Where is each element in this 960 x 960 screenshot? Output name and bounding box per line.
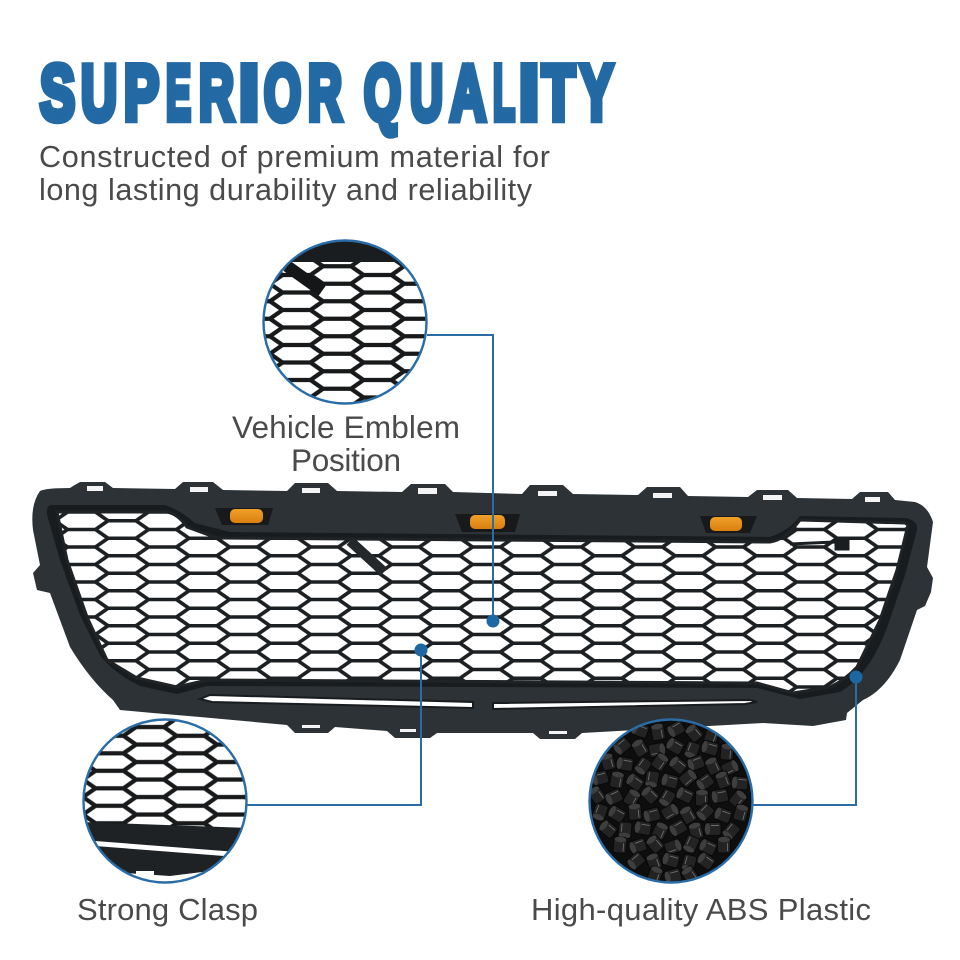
title: I bbox=[519, 48, 539, 136]
amber marker lamp right bbox=[700, 516, 757, 533]
title: R bbox=[308, 48, 342, 136]
amber marker lamp left bbox=[215, 508, 273, 525]
honeycomb mesh opening bbox=[57, 512, 908, 693]
subtitle text block bbox=[39, 140, 550, 207]
title: U bbox=[81, 48, 117, 136]
title: T bbox=[542, 48, 575, 136]
title: L bbox=[493, 48, 515, 136]
title: S bbox=[40, 48, 75, 136]
title: Q bbox=[364, 48, 401, 136]
connector behind mesh bbox=[790, 539, 848, 549]
title: U bbox=[410, 48, 443, 136]
label: high-quality ABS plastic: High-quality ABS Plastic bbox=[531, 892, 871, 927]
lower slot right bbox=[493, 700, 757, 709]
label: strong clasp: Strong Clasp bbox=[77, 892, 258, 927]
frame tab windows bbox=[87, 486, 880, 734]
title: O bbox=[264, 48, 301, 136]
callout connector: strong clasp bbox=[247, 644, 428, 805]
label: vehicle emblem position: Position bbox=[291, 442, 401, 478]
inner channel bbox=[47, 505, 917, 699]
callout connector: ABS plastic bbox=[753, 670, 862, 805]
subtitle text block: long lasting durability and reliability bbox=[39, 173, 533, 207]
label: vehicle emblem position: Vehicle Emblem bbox=[232, 409, 460, 445]
callout connector: vehicle emblem bbox=[427, 335, 500, 628]
detail circle: vehicle emblem mesh bbox=[260, 235, 430, 410]
lower slot left bbox=[200, 695, 473, 708]
label: vehicle emblem position bbox=[232, 409, 460, 478]
detail circle: ABS plastic granules bbox=[587, 719, 752, 885]
title: Y bbox=[580, 48, 613, 136]
title: R bbox=[199, 48, 234, 136]
title: P bbox=[124, 48, 159, 136]
grille product photo bbox=[32, 482, 933, 739]
grille outer frame bbox=[32, 482, 933, 739]
title: A bbox=[450, 48, 486, 136]
title: I bbox=[239, 48, 259, 136]
detail circle: strong clasp bbox=[80, 715, 250, 882]
subtitle text block: Constructed of premium material for bbox=[39, 140, 550, 174]
title: E bbox=[166, 48, 191, 136]
wire behind mesh bbox=[350, 541, 384, 572]
amber marker lamp centre bbox=[455, 514, 520, 532]
